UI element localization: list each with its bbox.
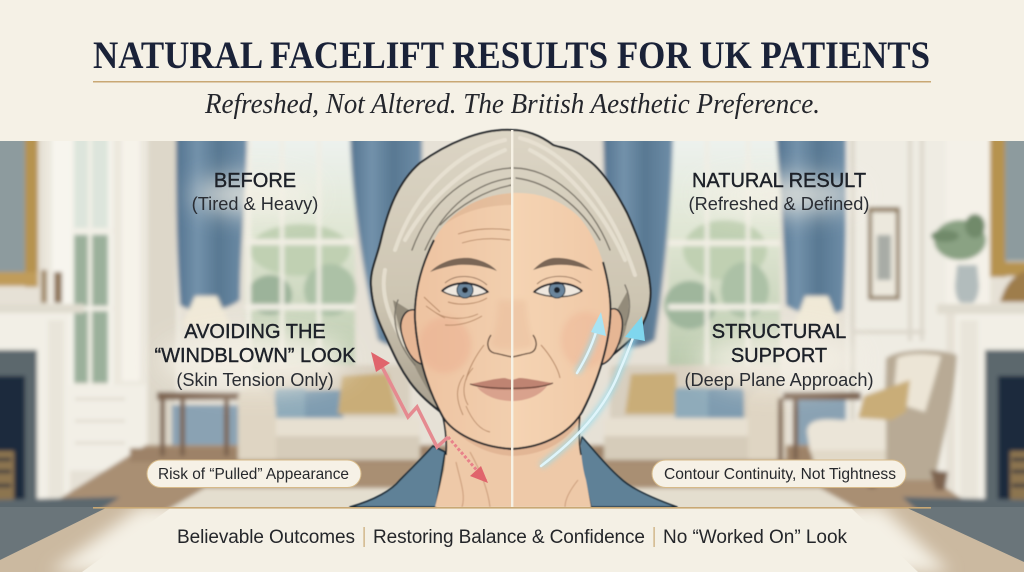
centre divider — [511, 130, 513, 507]
bottom band background with floor and mats — [0, 507, 1024, 572]
hair — [371, 130, 650, 415]
shirt and collars — [350, 437, 677, 507]
label: natural result — [689, 170, 869, 214]
right wall panelling — [846, 131, 990, 471]
label: avoiding the windblown look: AVOIDING THE — [184, 321, 326, 343]
label: structural support: STRUCTURAL — [712, 321, 846, 343]
portrait: split face — [350, 130, 677, 507]
framed picture — [868, 207, 900, 300]
label: structural support: SUPPORT — [731, 345, 827, 367]
face outline — [415, 240, 611, 449]
blue arrows: structural lift — [541, 312, 645, 466]
left mat — [0, 495, 120, 507]
neck outline — [443, 405, 581, 455]
bottom benefits line: No “Worked On” Look — [663, 527, 848, 548]
wainscot — [100, 442, 142, 467]
centre left window — [245, 131, 356, 381]
subtitle: Refreshed, Not Altered. The British Aesthetic Preference. — [204, 89, 820, 120]
right mat — [902, 495, 1024, 507]
header rule — [93, 81, 931, 82]
nose shading — [490, 300, 534, 350]
callout pill: pulled appearance: Risk of “Pulled” Appearance — [158, 466, 349, 483]
left side table — [157, 392, 243, 456]
label: avoiding the windblown look: “WINDBLOWN” LOOK — [154, 345, 356, 367]
cheek blush — [419, 193, 609, 373]
bottom gold rule — [93, 507, 931, 509]
left tall window — [70, 131, 113, 386]
right mirror — [990, 131, 1024, 302]
centre right curtains — [603, 131, 673, 348]
hair dark underlayer — [393, 300, 440, 408]
label: natural result: NATURAL RESULT — [692, 170, 866, 192]
wrinkles left half — [424, 229, 510, 432]
eyebrows — [430, 258, 593, 272]
top header band — [0, 0, 1024, 141]
lips — [470, 378, 553, 401]
label: natural result: (Refreshed & Defined) — [689, 194, 869, 214]
ears — [401, 309, 622, 365]
right side table — [778, 392, 861, 460]
floor — [60, 442, 962, 507]
label: avoiding the windblown look: (Skin Tension Only) — [176, 370, 334, 390]
nose — [488, 335, 536, 357]
face: right half — [512, 193, 610, 449]
background scene: blurred living room — [0, 131, 1024, 517]
centre left curtains — [176, 131, 247, 311]
left sofa — [238, 365, 420, 460]
label: avoiding the windblown look — [154, 321, 356, 390]
bottom benefits line: Believable Outcomes — [177, 527, 355, 548]
plant in vase — [931, 214, 986, 303]
label: structural support — [684, 321, 874, 390]
callout pill: pulled appearance — [147, 460, 361, 488]
callout pill: contour continuity: Contour Continuity, Not Tightness — [664, 466, 896, 483]
neck shadow and lines — [445, 420, 580, 507]
label: before: BEFORE — [214, 170, 296, 192]
left wall panelling — [48, 141, 176, 445]
label: before: (Tired & Heavy) — [192, 194, 318, 214]
label glow patches — [160, 177, 859, 388]
right fireplace — [937, 304, 1024, 517]
label: structural support: (Deep Plane Approach) — [684, 370, 874, 390]
face: left half — [415, 193, 512, 449]
hair strands — [384, 138, 635, 365]
centre right window — [664, 131, 780, 381]
bottom benefits line: Restoring Balance & Confidence — [373, 527, 645, 548]
red arrow: skin tension — [371, 352, 488, 483]
smile lines — [466, 345, 560, 380]
title: NATURAL FACELIFT RESULTS FOR UK PATIENTS — [93, 34, 930, 77]
left mirror — [0, 131, 62, 303]
neck — [435, 405, 591, 507]
bottom benefits line — [177, 527, 848, 548]
label: before — [192, 170, 318, 214]
right eye — [534, 276, 582, 298]
callout pill: contour continuity — [652, 460, 906, 488]
armchair — [807, 350, 957, 490]
right sofa — [604, 365, 786, 460]
left eye — [442, 276, 488, 304]
lamps — [186, 292, 225, 324]
left fireplace — [0, 304, 84, 517]
